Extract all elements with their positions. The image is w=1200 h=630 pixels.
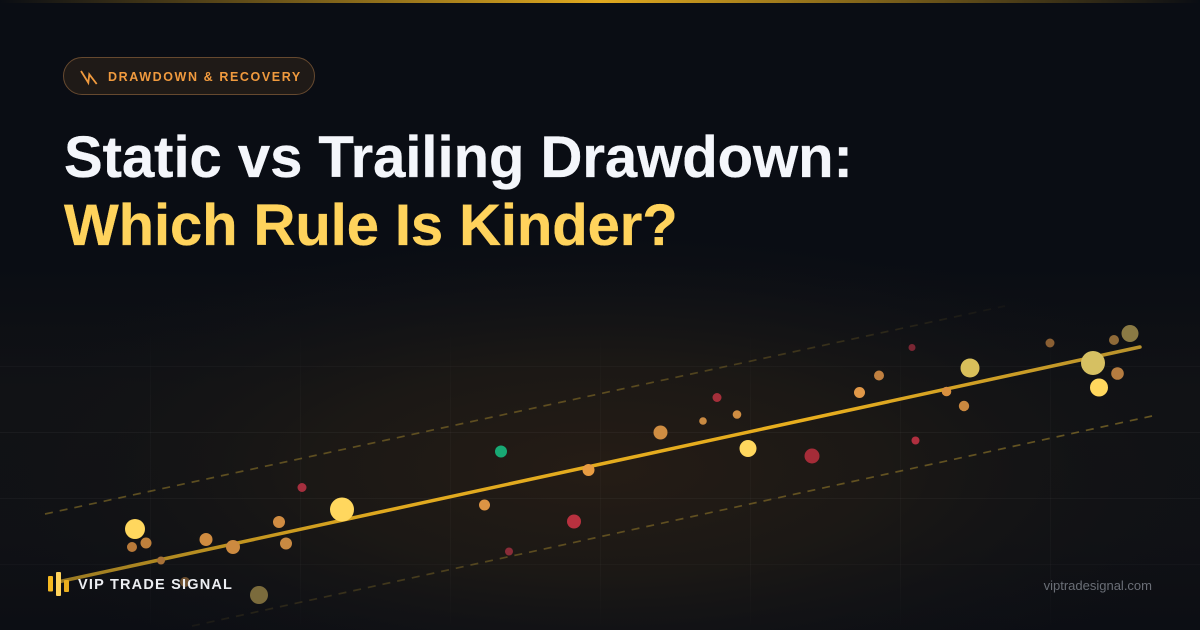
icon: logo bars bbox=[48, 572, 69, 596]
website url: viptradesignal.com bbox=[1044, 578, 1152, 593]
data points bbox=[125, 325, 1138, 604]
category badge bbox=[63, 57, 315, 95]
brand name: VIP TRADE SIGNAL bbox=[78, 577, 233, 593]
brand logo bbox=[48, 572, 233, 596]
title bbox=[64, 125, 853, 258]
dashed band: upper bbox=[45, 306, 1005, 514]
badge label: DRAWDOWN & RECOVERY bbox=[108, 70, 302, 84]
top accent bar bbox=[0, 0, 1200, 3]
title: Which Rule Is Kinder? bbox=[64, 192, 678, 258]
title: Static vs Trailing Drawdown: bbox=[64, 125, 853, 190]
dashed band: lower bbox=[192, 416, 1152, 626]
icon: drawdown zigzag bbox=[80, 70, 98, 86]
trend line bbox=[60, 347, 1140, 582]
